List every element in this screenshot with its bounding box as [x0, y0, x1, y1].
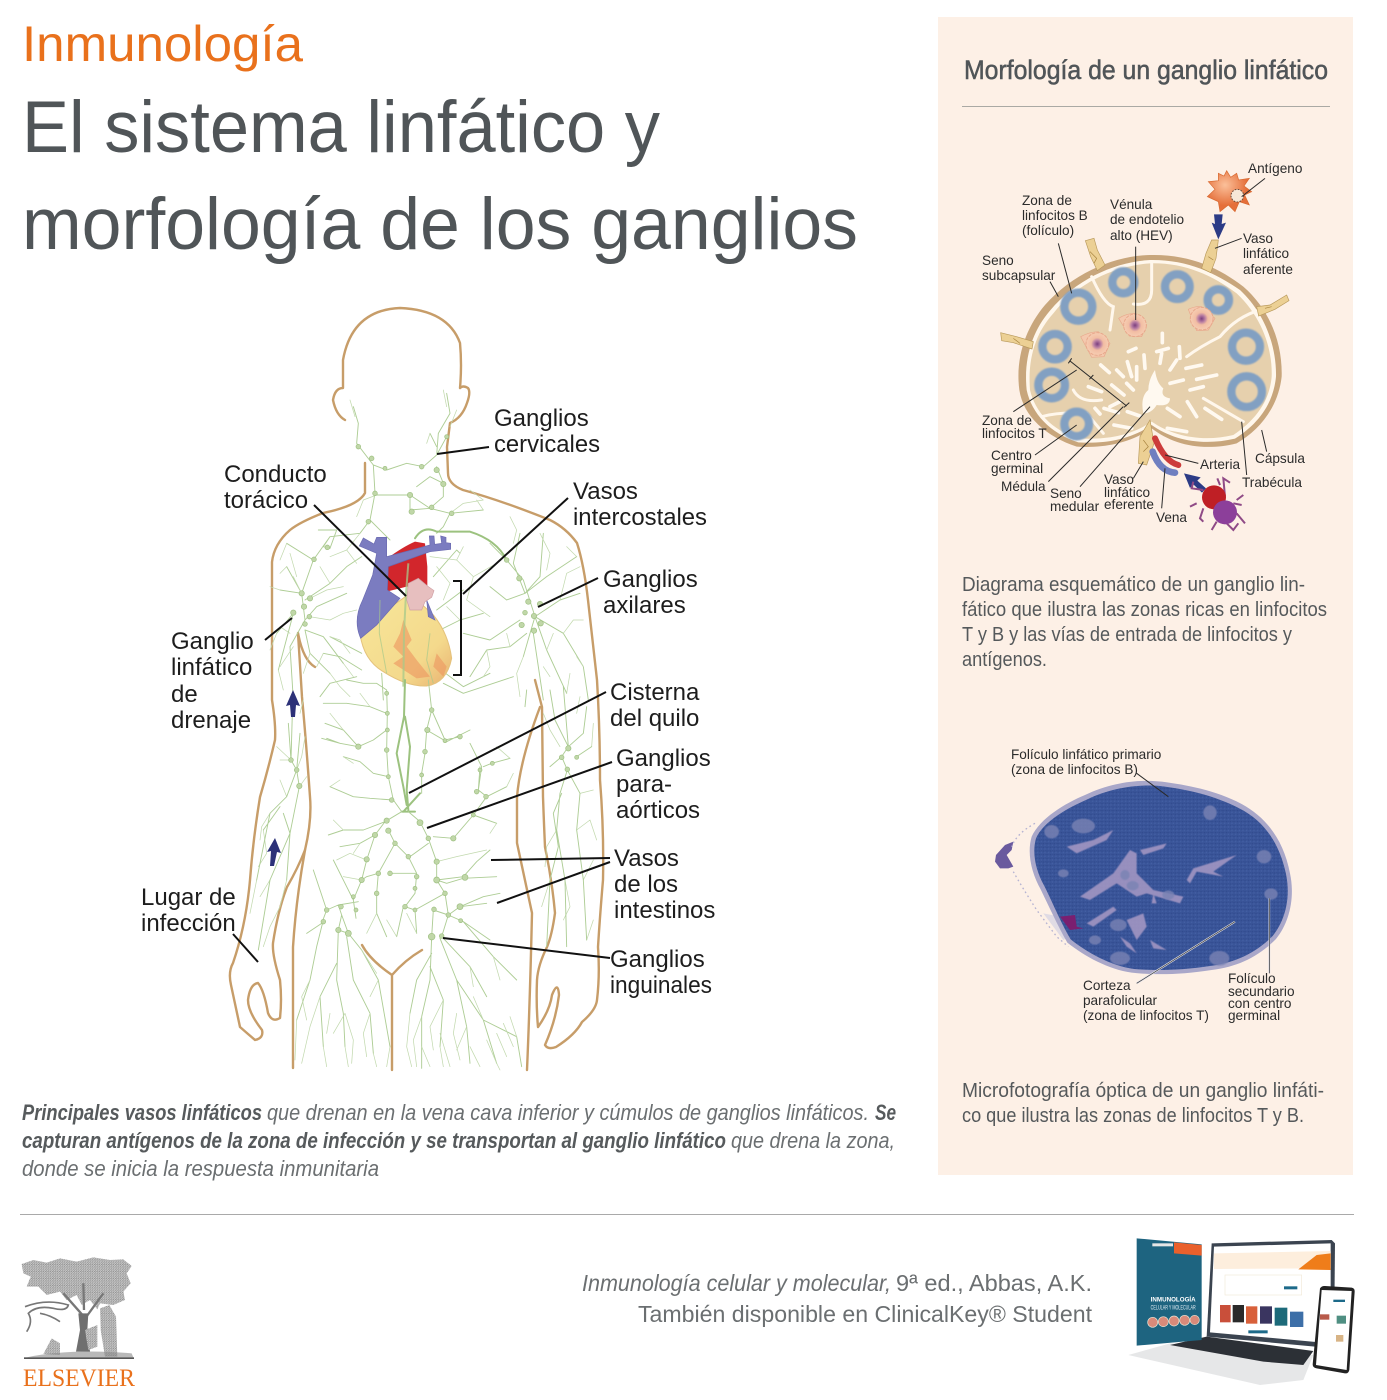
body labels: intestinos [614, 897, 715, 924]
caption: lymphatic system [22, 1100, 896, 1181]
heart [357, 536, 452, 687]
body labels: Vasos [614, 845, 679, 872]
micrograph labels [1011, 747, 1295, 1023]
medulla [1088, 333, 1222, 432]
node labels: Vena [1156, 510, 1187, 525]
body labels: inguinales [610, 972, 712, 999]
node labels: linfocitos B [1022, 208, 1088, 223]
micrograph labels: germinal [1228, 1008, 1280, 1023]
trabeculae [1042, 262, 1260, 433]
body labels: Ganglios [494, 405, 589, 432]
text: micrograph description [962, 1080, 1324, 1127]
text: micrograph description: co que ilustra las zonas de linfocitos T y B. [962, 1105, 1304, 1127]
node labels: Cápsula [1255, 451, 1305, 466]
node labels: Trabécula [1242, 475, 1302, 490]
caption: lymphatic system: que drena la zona, [731, 1128, 895, 1153]
node labels: Zona de [982, 413, 1032, 428]
tissue body [1030, 781, 1292, 974]
laptop base [1128, 1343, 1313, 1385]
cell: lymphocytes [1190, 478, 1245, 530]
body labels: cervicales [494, 431, 600, 458]
node labels: germinal [991, 461, 1043, 476]
body labels: intercostales [573, 504, 707, 531]
body labels: axilares [603, 592, 686, 619]
body labels: Cisterna [610, 679, 700, 706]
micrograph leader lines [1137, 773, 1269, 983]
lymph vessels: lower body [250, 680, 597, 1070]
panel: lymphatic system body figure [141, 308, 715, 1070]
footer: book reference: También disponible en ClinicalKey® Student [638, 1301, 1093, 1327]
leader lines [233, 447, 612, 962]
capsule [1018, 255, 1282, 447]
body labels: drenaje [171, 707, 251, 734]
footer: book reference [582, 1270, 1093, 1327]
main title: morfología de los ganglios [22, 184, 858, 265]
high endothelial venules [1081, 307, 1215, 357]
body labels: aórticos [616, 797, 700, 824]
body labels: linfático [171, 654, 252, 681]
body labels: infección [141, 910, 236, 937]
micrograph labels: Folículo [1228, 971, 1276, 986]
text: diagram description: Diagrama esquemático de un ganglio lin- [962, 574, 1305, 596]
icon: drainage arrow lower [267, 838, 281, 866]
text: micrograph description: Microfotografía óptica de un ganglio linfáti- [962, 1080, 1324, 1102]
node labels: aferente [1243, 262, 1293, 277]
diagram: lymph node [982, 161, 1305, 530]
body labels: de [171, 681, 198, 708]
node labels: linfático [1243, 246, 1289, 261]
node labels: Centro [991, 448, 1032, 463]
body labels: Vasos [573, 478, 638, 505]
text: diagram description: T y B y las vías de entrada de linfocitos y [962, 624, 1292, 646]
footer: book reference: 9ª ed., Abbas, A.K. [896, 1270, 1092, 1296]
efferent vessels: artery and vein [1153, 438, 1178, 473]
node labels: (folículo) [1022, 223, 1074, 238]
node labels: Zona de [1022, 193, 1072, 208]
paracortical sinuses [1067, 830, 1237, 953]
logo wordmark: ELSEVIER [23, 1365, 135, 1392]
node labels: linfático [1104, 485, 1150, 500]
node leader lines [1013, 178, 1267, 508]
micrograph labels: Folículo linfático primario [1011, 747, 1161, 762]
caption: lymphatic system: que drenan en la vena cava inferior y cúmulos de ganglios linfáticos. [267, 1100, 869, 1125]
follicles [1044, 805, 1278, 966]
body labels [141, 405, 715, 999]
cell: antigen presenting [1207, 171, 1252, 212]
tissue fragments [995, 823, 1070, 947]
text: diagram description [962, 574, 1327, 671]
text: diagram description: fático que ilustra las zonas ricas en linfocitos [962, 599, 1327, 621]
node labels: de endotelio [1110, 212, 1184, 227]
follicles [1038, 271, 1262, 436]
node labels: eferente [1104, 497, 1154, 512]
node labels: Vaso [1104, 472, 1134, 487]
body labels: de los [614, 871, 678, 898]
node labels: Antígeno [1248, 161, 1302, 176]
body outline [230, 308, 603, 1070]
micrograph labels: con centro [1228, 996, 1291, 1011]
micrograph labels: (zona de linfocitos B) [1011, 762, 1138, 777]
body labels: torácico [224, 487, 308, 514]
node labels [982, 161, 1305, 525]
caption: lymphatic system: capturan antígenos de la zona de infección y se transportan al ganglio linfático [22, 1128, 726, 1153]
photomicrograph: lymph node [995, 747, 1295, 1023]
text: diagram description: antígenos. [962, 649, 1047, 671]
image: book, laptop and phone [1128, 1238, 1355, 1385]
body labels: Ganglios [603, 566, 698, 593]
icon: arrows [1184, 214, 1226, 493]
micrograph labels: parafolicular [1083, 993, 1158, 1008]
lymph nodes: upper body [291, 435, 543, 633]
body labels: Ganglios [610, 946, 705, 973]
logo tree [22, 1257, 134, 1359]
heading: section: Inmunología [22, 16, 303, 72]
node labels: alto (HEV) [1110, 228, 1173, 243]
node labels: Vaso [1243, 231, 1273, 246]
micrograph labels: secundario [1228, 984, 1295, 999]
caption: lymphatic system: Principales vasos linfáticos [22, 1100, 262, 1125]
caption: lymphatic system: donde se inicia la respuesta inmunitaria [22, 1156, 379, 1181]
book: INMUNOLOGÍA [1151, 1295, 1196, 1304]
panel heading: Morfología de un ganglio linfático [964, 55, 1328, 85]
lymph vessels: upper body [270, 390, 588, 700]
node labels: Seno [982, 253, 1014, 268]
body labels: Lugar de [141, 884, 236, 911]
book: CELULAR Y MOLECULAR [1151, 1306, 1196, 1312]
node labels: linfocitos T [982, 426, 1047, 441]
laptop screen [1207, 1240, 1335, 1348]
body labels: Ganglio [171, 628, 254, 655]
panel: lymph node morphology [938, 17, 1353, 1175]
main title [22, 87, 858, 265]
node labels: subcapsular [982, 268, 1056, 283]
afferent vessels [1001, 238, 1289, 465]
book [1137, 1238, 1202, 1346]
node labels: Vénula [1110, 197, 1153, 212]
micrograph labels: Corteza [1083, 978, 1131, 993]
caption: lymphatic system: Se [875, 1100, 896, 1125]
main title: El sistema linfático y [22, 87, 660, 168]
icon: drainage arrow upper [286, 690, 300, 717]
node labels: Seno [1050, 486, 1082, 501]
body labels: Ganglios [616, 745, 711, 772]
body labels: para- [616, 771, 672, 798]
logo: Elsevier [22, 1257, 135, 1392]
footer: book reference: Inmunología celular y molecular, [582, 1270, 891, 1296]
micrograph labels: (zona de linfocitos T) [1083, 1008, 1209, 1023]
node labels: Arteria [1200, 457, 1240, 472]
body labels: del quilo [610, 705, 699, 732]
phone [1313, 1286, 1355, 1373]
node labels: Médula [1001, 479, 1046, 494]
body labels: Conducto [224, 461, 327, 488]
node labels: medular [1050, 499, 1100, 514]
